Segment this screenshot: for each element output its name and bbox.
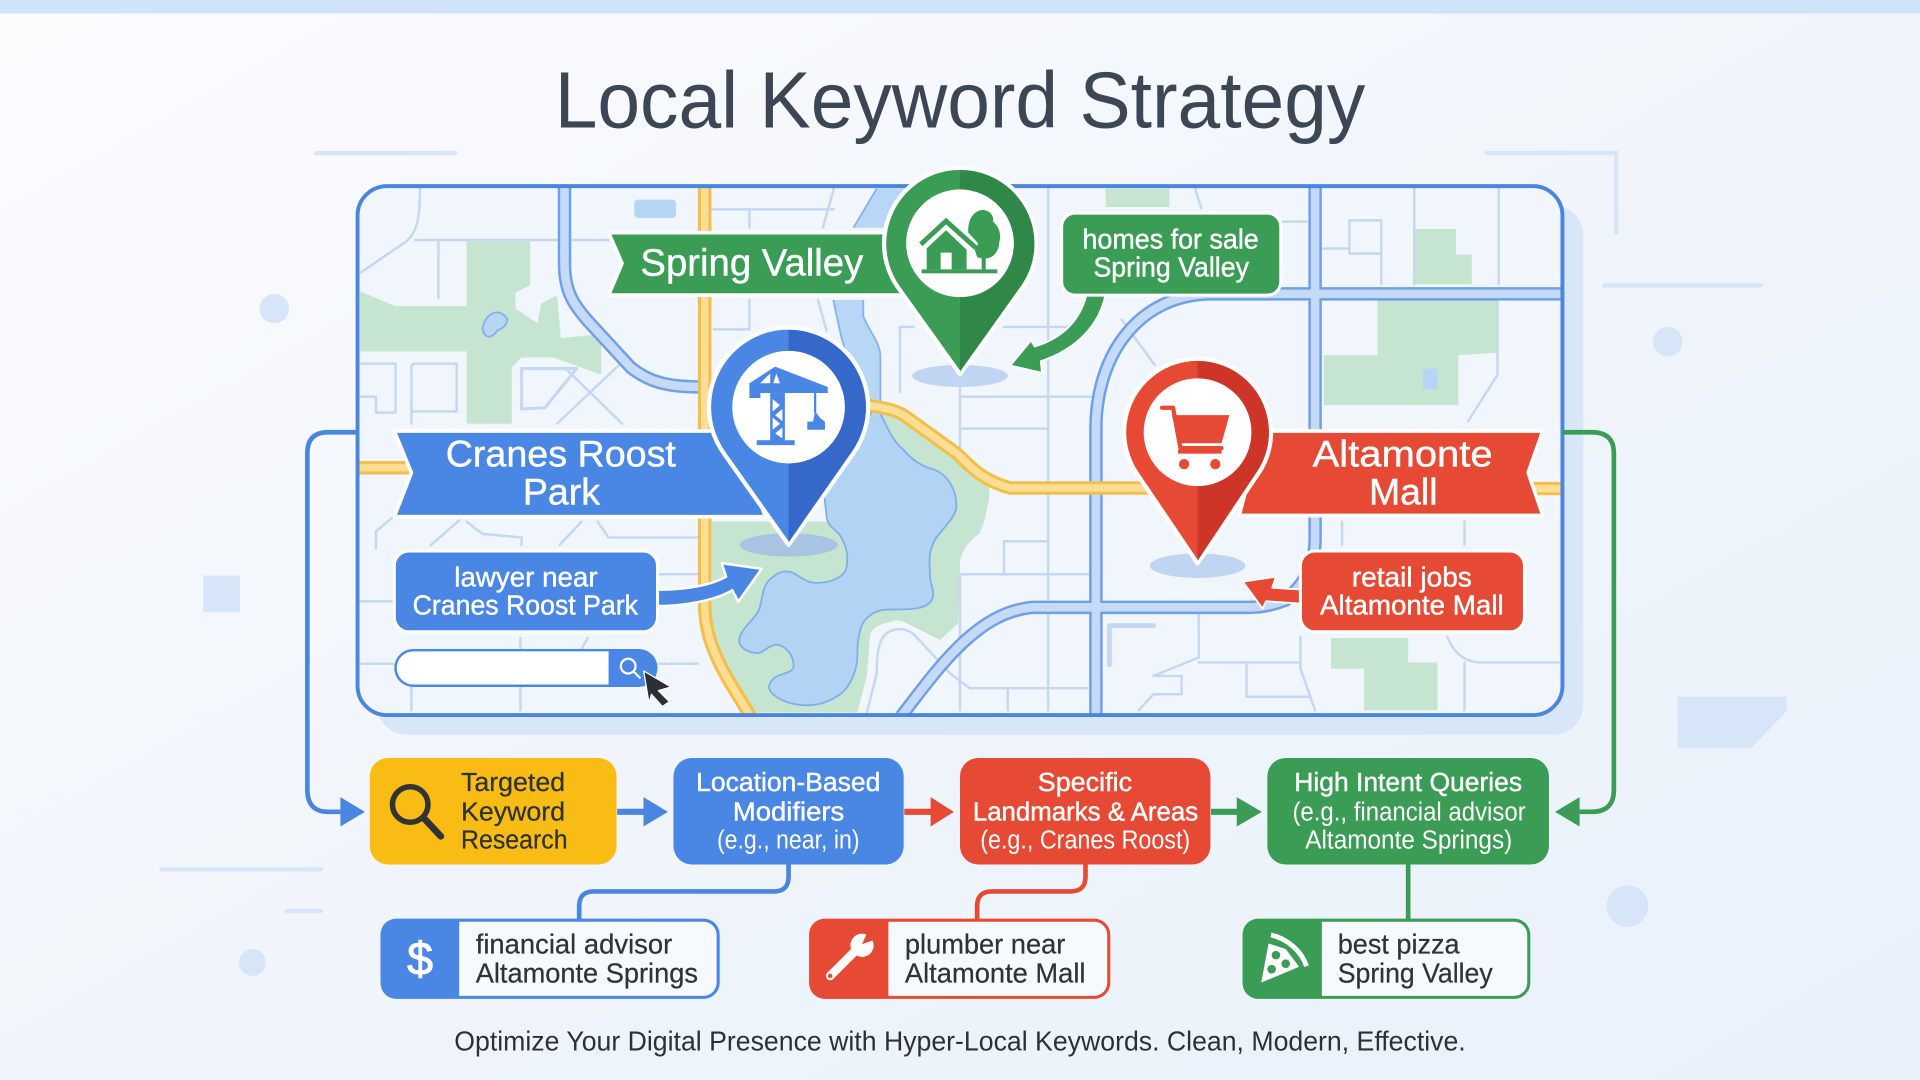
example: best pizza: Spring Valley [1338,958,1493,989]
arrow: retail callout to pin [1243,577,1302,609]
caption: Optimize Your Digital Presence with Hyper-Local Keywords. Clean, Modern, Effective. [454,1026,1466,1057]
example: financial advisor: financial advisor [476,928,672,959]
callout: homes for sale [1010,213,1281,373]
main blue roads [564,184,1567,722]
example: financial advisor [381,919,718,999]
banner: Altamonte Mall: Mall [1369,471,1438,512]
banner: Cranes Roost Park: Park [523,471,601,512]
banner: Spring Valley: Spring Valley [640,243,863,285]
step: High Intent Queries [1267,758,1549,864]
icon: magnifier [621,659,640,678]
step: Specific Landmarks and Areas [960,758,1210,864]
icon: dollar: $ [407,933,433,985]
banner: Altamonte Mall: Altamonte [1313,434,1493,475]
step: Targeted Keyword Research: Targeted [461,767,565,797]
connector: map to research [307,432,365,827]
callout: retail jobs: retail jobs [1352,562,1472,593]
step: Location-Based Modifiers: Location-Based [696,767,880,797]
arrow: modifiers to landmarks [904,797,954,827]
banner: Cranes Roost Park [394,431,765,517]
banner: Spring Valley [609,233,906,295]
step: Specific Landmarks and Areas: Landmarks & Areas [973,796,1198,826]
example: plumber near: plumber near [905,928,1065,959]
ponds [482,200,1438,389]
banner: Altamonte Mall [1239,431,1543,516]
callout: retail jobs: Altamonte Mall [1320,590,1504,621]
map shadow [377,206,1583,735]
minor streets [360,189,1559,713]
arrow: research to modifiers [617,797,668,827]
arrow: homes callout to pin [1010,294,1106,373]
callout: lawyer near [394,551,762,632]
step: Targeted Keyword Research [370,758,617,864]
arrow: lawyer callout to pin [656,563,762,606]
step: High Intent Queries: (e.g., financial advisor [1292,796,1526,826]
icon: wrench [828,931,877,978]
river [833,189,912,407]
callout: retail jobs [1243,551,1524,632]
step: Targeted Keyword Research: Research [461,825,568,855]
pin: Altamonte Mall [1124,359,1271,563]
callout: lawyer near: Cranes Roost Park [413,590,638,621]
example: best pizza: best pizza [1338,928,1460,959]
parks [360,189,1498,713]
decorative background shapes [162,153,1787,976]
connector: map to high intent [1555,432,1614,827]
callout: homes for sale: homes for sale [1082,224,1259,255]
map contents [358,184,1567,722]
step: Location-Based Modifiers: (e.g., near, in) [717,825,860,855]
road halo below lake [867,629,970,713]
callout: homes for sale: Spring Valley [1093,252,1249,283]
lake [739,407,956,705]
callout: lawyer near: lawyer near [454,562,598,593]
example: plumber near [809,919,1109,999]
map base [358,186,1562,715]
yellow roads [358,184,1567,716]
step: Specific Landmarks and Areas: (e.g., Cranes Roost) [980,825,1190,855]
icon: magnifying glass [392,787,441,836]
banner: Cranes Roost Park: Cranes Roost [446,434,676,475]
example: financial advisor: Altamonte Springs [476,958,698,989]
example: plumber near: Altamonte Mall [905,958,1086,989]
step: Specific Landmarks and Areas: Specific [1038,767,1132,797]
pin shadows [740,365,1245,578]
pin: Cranes Roost Park [709,328,868,545]
step: High Intent Queries: High Intent Queries [1294,767,1522,797]
title: Local Keyword Strategy [555,55,1366,144]
icon: crane [749,367,828,445]
step: Location-Based Modifiers [673,758,904,864]
arrow: landmarks to high intent [1211,797,1262,827]
icon: shopping cart [1162,408,1229,469]
step: Targeted Keyword Research: Keyword [461,796,565,826]
icon: house and tree [921,210,1000,273]
icon: pizza slice [1261,935,1307,983]
map frame [358,186,1562,715]
example: best pizza [1243,919,1529,999]
pin: Spring Valley [884,168,1036,374]
flow connectors to example boxes [579,864,1408,921]
icon: cursor [644,671,671,707]
map panel [358,184,1583,735]
search bar [394,649,671,707]
step: Location-Based Modifiers: Modifiers [733,796,844,826]
step: High Intent Queries: Altamonte Springs) [1305,825,1512,855]
